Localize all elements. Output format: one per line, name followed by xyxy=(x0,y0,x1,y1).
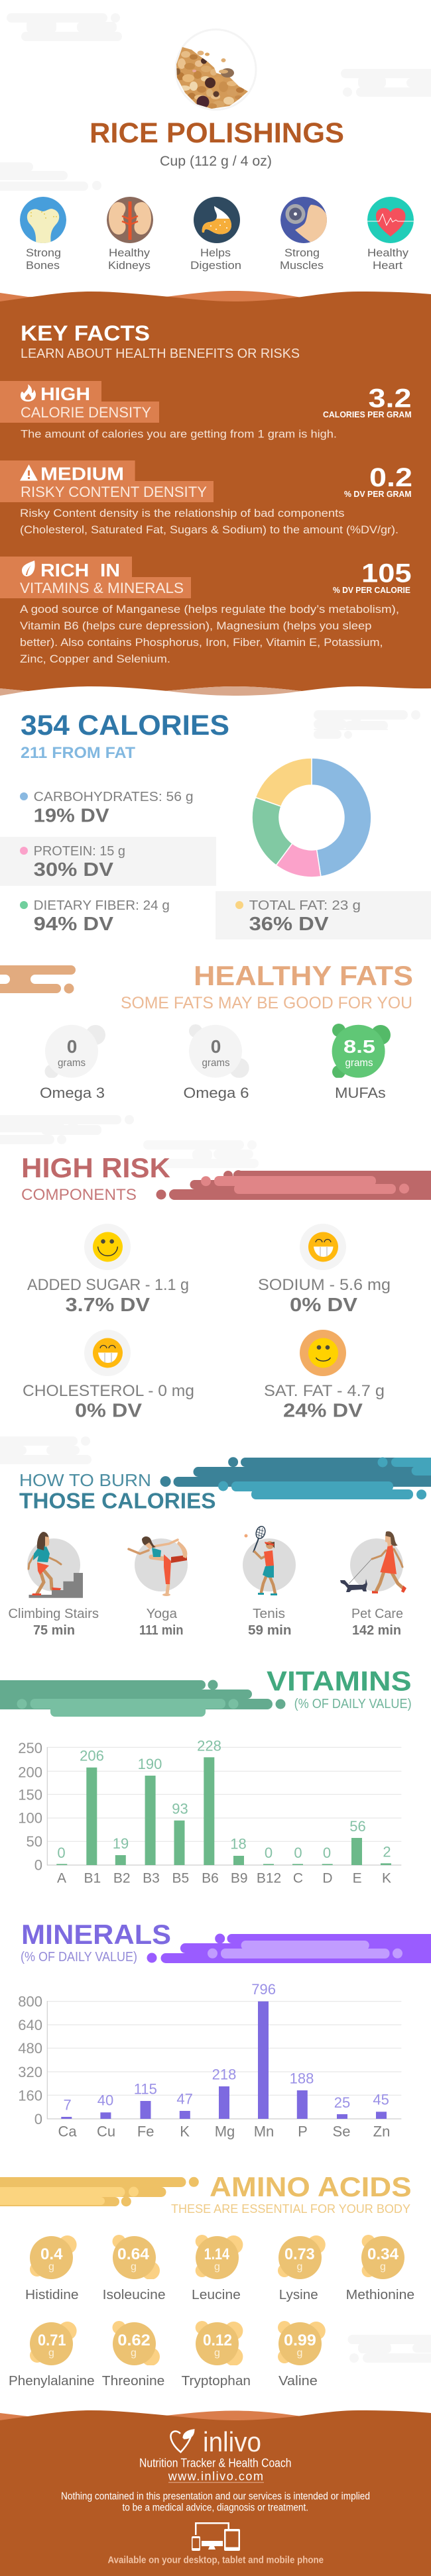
description xyxy=(20,603,399,665)
background cloud: calories xyxy=(314,710,420,739)
label: helps digestion: Digestion xyxy=(190,259,241,272)
bar chart: minerals: 480 xyxy=(18,2040,42,2057)
label: healthy heart: Heart xyxy=(373,259,402,272)
description: Vitamin B6 (helps cure depression), Magnesium (helps you sleep xyxy=(20,619,371,632)
bar chart: minerals: 40 xyxy=(97,2092,113,2109)
subheading: minerals: (% OF DAILY VALUE) xyxy=(21,1950,137,1964)
label: yoga: 111 min xyxy=(139,1623,183,1638)
amino acid: lysine xyxy=(278,2235,326,2302)
risk: cholesterol xyxy=(23,1330,194,1422)
stat: 3.2 calories per gram: CALORIES PER GRAM xyxy=(323,410,412,419)
bar chart: vitamins: 56 xyxy=(349,1818,366,1835)
bar chart: minerals: Se xyxy=(333,2123,350,2139)
fat: omega 3 xyxy=(40,1025,105,1101)
icon: flame xyxy=(21,384,36,402)
label: pet care: 142 min xyxy=(352,1623,401,1638)
icon: warning triangle xyxy=(20,464,38,481)
description: A good source of Manganese (helps regulate the body’s metabolism), xyxy=(20,603,399,616)
background clouds: above high risk xyxy=(0,1115,134,1144)
risk: saturated fat xyxy=(264,1330,385,1422)
bar chart: minerals: Fe xyxy=(137,2123,154,2139)
fat: mufas: grams xyxy=(345,1057,373,1069)
label: helps digestion xyxy=(190,246,241,272)
amino acid: valine: Valine xyxy=(278,2374,318,2388)
stat: 0.2 dv per gram: % DV PER GRAM xyxy=(344,490,412,499)
bar chart: minerals xyxy=(18,1981,401,2139)
bar chart: vitamins: B5 xyxy=(172,1871,189,1886)
subheading: amino acids: THESE ARE ESSENTIAL FOR YOUR BODY xyxy=(171,2202,410,2216)
donut chart xyxy=(252,758,371,877)
description: (Cholesterol, Saturated Fat, Sugars & Sodium) to the amount (%DV/gr). xyxy=(20,523,399,536)
disclaimer xyxy=(61,2491,370,2513)
amino acid: leucine: g xyxy=(214,2261,220,2273)
label: strong muscles: Muscles xyxy=(280,259,324,272)
bar chart: minerals: 25 xyxy=(334,2094,350,2111)
fat: omega 3: Omega 3 xyxy=(40,1085,105,1101)
bar chart: minerals: Zn xyxy=(373,2123,390,2139)
label: tennis: 59 min xyxy=(248,1623,292,1638)
legend: protein: PROTEIN: 15 g xyxy=(34,844,125,859)
bar chart: minerals: 0 xyxy=(34,2111,42,2127)
icon: leaf xyxy=(22,561,35,576)
decoration: amino acids stripe xyxy=(0,2177,199,2206)
bar chart: vitamins: 206 xyxy=(80,1747,104,1764)
amino acid: histidine xyxy=(25,2235,79,2302)
risk: added sugar: 3.7% DV xyxy=(66,1295,151,1316)
bar chart: minerals: Mg xyxy=(215,2123,235,2139)
label: strong bones: Bones xyxy=(26,259,60,272)
description: better). Also contains Phosphorus, Iron, Fiber, Vitamin E, Potassium, xyxy=(20,636,383,649)
label: vitamins and minerals: VITAMINS & MINERALS xyxy=(20,580,184,596)
bar chart: vitamins: 0 xyxy=(294,1845,302,1861)
serving size: Cup (112 g / 4 oz) xyxy=(160,154,272,169)
amino acid: phenylalanine xyxy=(9,2322,95,2388)
bar chart: vitamins: 18 xyxy=(230,1836,247,1852)
amino acid: histidine: g xyxy=(48,2261,54,2273)
amino acid: valine: g xyxy=(297,2347,302,2359)
bar chart: minerals: 115 xyxy=(134,2081,157,2098)
label: healthy kidneys: Healthy xyxy=(109,246,151,259)
label: healthy kidneys xyxy=(108,246,151,272)
fact: rich in vitamins and minerals xyxy=(0,557,412,665)
amino acid: leucine xyxy=(192,2235,243,2302)
label: strong muscles: Strong xyxy=(284,246,320,259)
fat: omega 6 xyxy=(183,1024,249,1101)
bar chart: vitamins: 93 xyxy=(172,1800,188,1817)
bar chart: vitamins: B9 xyxy=(231,1871,248,1886)
description: The amount of calories you are getting from 1 gram is high. xyxy=(21,428,337,440)
fact: high calorie density xyxy=(0,381,412,440)
background cloud: mid left xyxy=(0,162,101,191)
bar chart: minerals: 218 xyxy=(212,2066,236,2082)
label: strong muscles xyxy=(280,246,324,272)
heading: vitamins: VITAMINS xyxy=(267,1666,412,1697)
risk: sodium: 0% DV xyxy=(290,1295,358,1316)
label: helps digestion: Helps xyxy=(200,246,231,259)
amino acid: histidine: Histidine xyxy=(25,2288,79,2302)
risk: cholesterol: CHOLESTEROL - 0 mg xyxy=(23,1382,194,1400)
bar chart: vitamins: B6 xyxy=(202,1871,219,1886)
amino acid: tryptophan xyxy=(182,2321,251,2388)
label: risky content density: RISKY CONTENT DENSITY xyxy=(21,484,207,500)
fat: mufas: 8.5 xyxy=(343,1036,375,1057)
legend: carbohydrates: 19% DV xyxy=(34,806,109,827)
icon: strong muscles xyxy=(280,197,328,243)
stat: 0.2 dv per gram: 0.2 xyxy=(369,463,412,492)
fat: omega 6: 0 xyxy=(211,1036,221,1057)
panel: protein background xyxy=(0,837,216,886)
fat: omega 3: 0 xyxy=(67,1036,77,1057)
bar chart: vitamins: K xyxy=(382,1871,391,1886)
stat: 0.2 dv per gram xyxy=(344,463,412,499)
description xyxy=(20,507,399,536)
legend: protein: 30% DV xyxy=(34,859,114,881)
bar chart: vitamins: B12 xyxy=(257,1871,281,1886)
decoration: burn stripe xyxy=(160,1457,431,1499)
fat: omega 3: grams xyxy=(58,1057,86,1069)
amino acid: methionine: Methionine xyxy=(346,2288,414,2302)
legend: total fat: TOTAL FAT: 23 g xyxy=(249,898,361,913)
risk: added sugar xyxy=(27,1224,189,1316)
amino acid: methionine xyxy=(346,2235,414,2302)
legend: carbohydrates: CARBOHYDRATES: 56 g xyxy=(34,790,194,804)
risk: saturated fat: SAT. FAT - 4.7 g xyxy=(264,1382,385,1400)
label: climbing stairs: 75 min xyxy=(33,1623,75,1638)
fat: mufas xyxy=(332,1024,391,1101)
label: strong bones: Strong xyxy=(26,246,61,259)
bar chart: minerals: 188 xyxy=(290,2070,314,2086)
label: yoga xyxy=(139,1607,183,1638)
amino acid: valine: 0.99 xyxy=(284,2332,316,2349)
disclaimer: to be a medical advice, diagnosis or treatment. xyxy=(122,2502,308,2513)
subheading: 211 from fat: 211 FROM FAT xyxy=(21,744,135,762)
activity: pet care xyxy=(340,1531,406,1593)
stat: 3.2 calories per gram: 3.2 xyxy=(369,384,411,413)
heading: amino acids: AMINO ACIDS xyxy=(210,2171,412,2202)
bar chart: vitamins: 228 xyxy=(197,1737,221,1754)
label: yoga: Yoga xyxy=(147,1607,178,1621)
tagline: Nutrition Tracker & Health Coach xyxy=(139,2456,292,2469)
bar chart: vitamins: 2 xyxy=(383,1843,391,1860)
amino acid: isoleucine: Isoleucine xyxy=(103,2288,166,2302)
amino acid: methionine: 0.34 xyxy=(367,2245,399,2263)
disclaimer: Nothing contained in this presentation and our services is intended or implied xyxy=(61,2491,370,2502)
bar chart: vitamins: 100 xyxy=(18,1810,42,1827)
legend: dietary fiber xyxy=(20,898,170,935)
description: Risky Content density is the relationship of bad components xyxy=(20,507,345,519)
legend: dietary fiber: 94% DV xyxy=(34,914,114,935)
amino acid: histidine: 0.4 xyxy=(40,2245,63,2263)
icon: healthy heart xyxy=(367,197,414,243)
heading: healthy fats: HEALTHY FATS xyxy=(194,960,413,991)
background cloud: above burn xyxy=(0,1436,92,1464)
amino acid: tryptophan: Tryptophan xyxy=(182,2374,251,2388)
amino acid: phenylalanine: 0.71 xyxy=(38,2332,66,2349)
icon: helps digestion xyxy=(194,197,240,243)
bar chart: vitamins: 0 xyxy=(323,1845,331,1861)
amino acid: leucine: Leucine xyxy=(192,2288,241,2302)
amino acid: lysine: Lysine xyxy=(279,2288,318,2302)
risk: sodium: SODIUM - 5.6 mg xyxy=(258,1276,391,1294)
fact: medium risky content density xyxy=(0,460,412,536)
label: climbing stairs xyxy=(8,1607,99,1638)
bar chart: vitamins: 0 xyxy=(34,1857,42,1874)
legend: protein xyxy=(20,844,125,881)
fat: mufas: MUFAs xyxy=(335,1085,386,1101)
fat: omega 6: grams xyxy=(202,1057,229,1069)
activity: tennis xyxy=(243,1525,296,1595)
bar chart: vitamins: 19 xyxy=(113,1835,129,1852)
bar chart: minerals: K xyxy=(180,2123,190,2139)
heading: 354 calories: 354 CALORIES xyxy=(21,710,229,741)
amino acid: threonine: 0.62 xyxy=(117,2332,151,2349)
amino acid: tryptophan: 0.12 xyxy=(203,2332,232,2349)
bar chart: minerals: P xyxy=(298,2123,308,2139)
bar chart: minerals: 160 xyxy=(18,2088,42,2104)
heading: how to burn: HOW TO BURN xyxy=(19,1470,151,1490)
risk: saturated fat: 24% DV xyxy=(283,1401,363,1422)
label: pet care: Pet Care xyxy=(351,1607,403,1621)
bar chart: minerals: 796 xyxy=(251,1981,276,1998)
bar chart: vitamins: C xyxy=(293,1871,303,1886)
bar chart: vitamins xyxy=(18,1737,401,1886)
subheading: healthy fats: SOME FATS MAY BE GOOD FOR YOU xyxy=(121,994,412,1012)
bar chart: vitamins: E xyxy=(353,1871,362,1886)
legend: carbohydrates xyxy=(20,790,194,827)
stat: 105 dv per calorie: % DV PER CALORIE xyxy=(333,586,410,595)
panel: footer xyxy=(0,2410,431,2576)
bar chart: minerals: Ca xyxy=(58,2123,77,2139)
background cloud: top right xyxy=(341,69,431,97)
bar chart: minerals: 800 xyxy=(18,1993,42,2010)
footer note: Available on your desktop, tablet and mobile phone xyxy=(107,2554,324,2565)
amino acid: methionine: g xyxy=(380,2261,386,2273)
icon: healthy kidneys xyxy=(107,197,153,243)
bar chart: vitamins: D xyxy=(322,1871,333,1886)
label: high: HIGH xyxy=(40,384,90,404)
icon: strong bones xyxy=(20,197,66,245)
panel: total fat background xyxy=(216,891,431,939)
heading: those calories: THOSE CALORIES xyxy=(19,1489,216,1513)
background cloud: top left xyxy=(7,13,122,41)
bar chart: minerals: 640 xyxy=(18,2017,42,2033)
label: healthy kidneys: Kidneys xyxy=(108,259,151,272)
background cloud: amino acids xyxy=(347,2335,431,2363)
amino acid: valine xyxy=(278,2321,326,2388)
decoration: minerals stripe xyxy=(147,1933,431,1963)
bar chart: minerals: 7 xyxy=(63,2096,72,2113)
description: Zinc, Copper and Selenium. xyxy=(20,653,170,665)
website link: www.inlivo.com xyxy=(168,2469,263,2483)
amino acid: threonine: Threonine xyxy=(102,2374,164,2388)
activity: climbing stairs xyxy=(27,1532,83,1598)
legend: total fat: 36% DV xyxy=(249,914,329,935)
background cloud: behind high risk xyxy=(143,1140,259,1168)
bar chart: vitamins: 0 xyxy=(265,1845,273,1861)
label: healthy heart xyxy=(367,246,409,272)
legend: total fat xyxy=(235,898,361,935)
fat: omega 6: Omega 6 xyxy=(183,1085,249,1101)
amino acid: phenylalanine: g xyxy=(48,2347,54,2359)
bar chart: minerals: 320 xyxy=(18,2064,42,2080)
amino acid: threonine: g xyxy=(131,2347,137,2359)
stat: 105 dv per calorie: 105 xyxy=(361,559,412,588)
bar chart: minerals: Mn xyxy=(254,2123,274,2139)
label: healthy heart: Healthy xyxy=(367,246,409,259)
subheading: vitamins: (% OF DAILY VALUE) xyxy=(294,1697,412,1711)
panel: key facts xyxy=(0,291,431,696)
title: RICE POLISHINGS xyxy=(90,117,344,149)
label: climbing stairs: Climbing Stairs xyxy=(8,1607,99,1621)
bar chart: vitamins: 250 xyxy=(18,1740,42,1756)
subheading: key facts: LEARN ABOUT HEALTH BENEFITS OR RISKS xyxy=(21,347,300,361)
bar chart: vitamins: B1 xyxy=(84,1871,101,1886)
amino acid: tryptophan: g xyxy=(214,2347,220,2359)
amino acid: threonine xyxy=(102,2321,164,2388)
heading: minerals: MINERALS xyxy=(21,1919,171,1950)
amino acid: isoleucine: g xyxy=(131,2261,137,2273)
label: calorie density: CALORIE DENSITY xyxy=(21,404,151,421)
bar chart: vitamins: 200 xyxy=(18,1764,42,1780)
bar chart: minerals: 47 xyxy=(176,2091,193,2108)
bar chart: vitamins: B3 xyxy=(143,1871,160,1886)
decoration: high risk stripe xyxy=(156,1170,431,1200)
bar chart: vitamins: A xyxy=(57,1871,66,1886)
stat: 3.2 calories per gram xyxy=(323,384,412,419)
bar chart: minerals: 45 xyxy=(373,2092,389,2108)
risk: sodium xyxy=(258,1224,391,1316)
stat: 105 dv per calorie xyxy=(333,559,412,595)
icon: devices xyxy=(192,2522,240,2551)
legend: dietary fiber: DIETARY FIBER: 24 g xyxy=(34,898,170,913)
amino acid: leucine: 1.14 xyxy=(204,2245,230,2263)
decoration: vitamins stripe xyxy=(0,1680,285,1717)
amino acid: phenylalanine: Phenylalanine xyxy=(9,2374,95,2388)
decoration: healthy fats stripe xyxy=(0,965,76,994)
label: tennis xyxy=(248,1607,292,1638)
bar chart: minerals: Cu xyxy=(97,2123,115,2139)
bar chart: vitamins: 0 xyxy=(57,1845,66,1861)
amino acid: lysine: 0.73 xyxy=(284,2245,315,2263)
label: rich in: RICH IN xyxy=(40,560,120,580)
amino acid: isoleucine: 0.64 xyxy=(117,2245,150,2263)
risk: added sugar: ADDED SUGAR - 1.1 g xyxy=(27,1276,189,1294)
amino acid: isoleucine xyxy=(103,2235,166,2302)
logo: inlivo heart xyxy=(170,2430,194,2452)
amino acid: lysine: g xyxy=(297,2261,302,2273)
activity: yoga xyxy=(129,1536,188,1596)
label: medium: MEDIUM xyxy=(40,464,124,484)
subheading: components: COMPONENTS xyxy=(21,1186,137,1204)
bar chart: vitamins: B2 xyxy=(113,1871,131,1886)
label: pet care xyxy=(351,1607,403,1638)
logo wordmark: inlivo: inlivo xyxy=(203,2426,261,2457)
label: strong bones xyxy=(26,246,61,272)
label: tennis: Tenis xyxy=(253,1607,285,1621)
bar chart: vitamins: 150 xyxy=(18,1787,42,1803)
heading: key facts: KEY FACTS xyxy=(21,321,150,345)
bar chart: vitamins: 190 xyxy=(138,1756,162,1772)
bar chart: vitamins: 50 xyxy=(27,1833,42,1850)
food image: granola in circle xyxy=(175,29,256,110)
heading: high risk: HIGH RISK xyxy=(21,1152,170,1183)
risk: cholesterol: 0% DV xyxy=(75,1401,143,1422)
